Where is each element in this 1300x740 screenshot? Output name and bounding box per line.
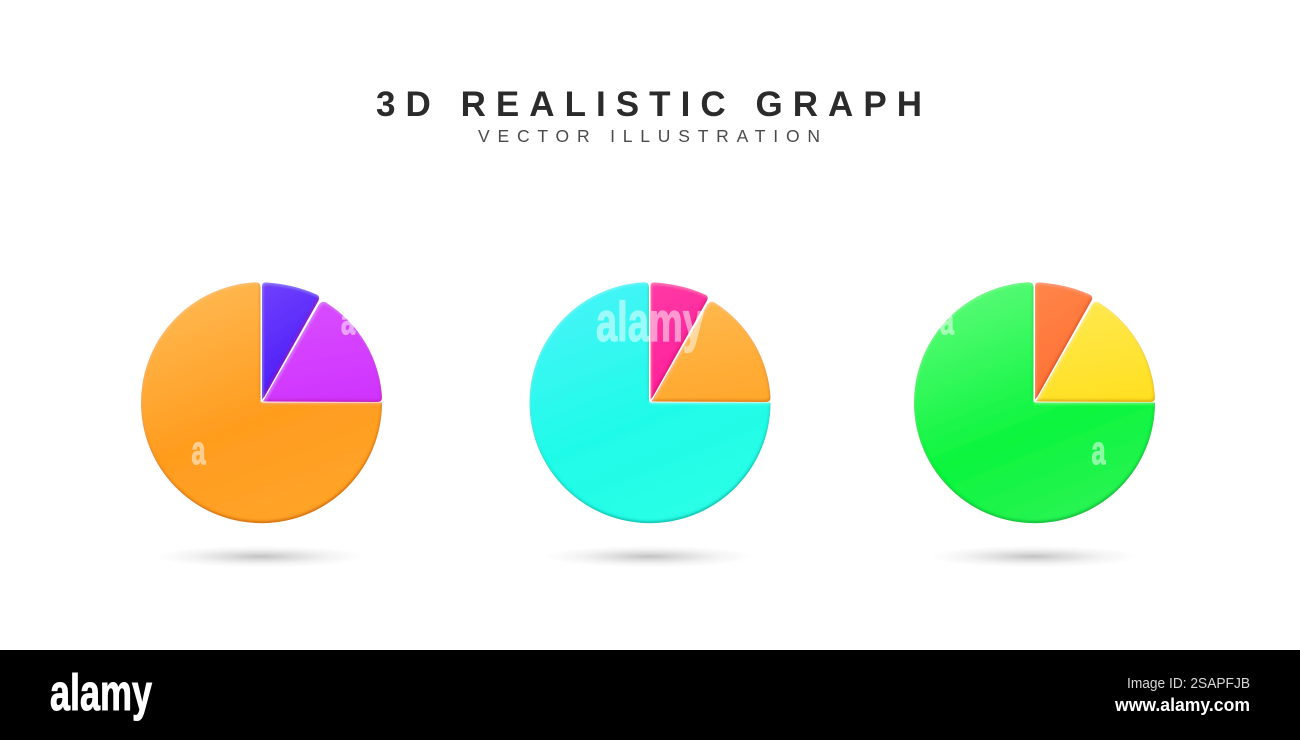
watermark: a — [940, 299, 954, 343]
watermark: alamy — [596, 290, 704, 353]
large green slice — [914, 282, 1155, 523]
shadow — [930, 546, 1138, 568]
watermark: a — [192, 429, 206, 473]
orange-red slice — [1035, 282, 1092, 400]
shadow — [545, 546, 753, 568]
purple slice — [263, 302, 382, 402]
chart: cyan pie — [530, 282, 771, 568]
amber slice — [652, 302, 770, 402]
image id: Image ID: 2SAPFJB — [1127, 675, 1250, 692]
shadow — [156, 546, 364, 568]
yellow slice — [1036, 302, 1155, 402]
large orange slice — [141, 282, 382, 523]
chart: orange pie — [141, 282, 382, 568]
pink slice — [650, 282, 708, 400]
website: www.alamy.com — [1114, 695, 1250, 715]
chart: green pie — [914, 282, 1155, 568]
watermark: a — [341, 299, 355, 343]
blue slice — [262, 282, 319, 400]
watermark: a — [1092, 429, 1106, 473]
footer logo: alamy — [50, 664, 152, 721]
title: 3D REALISTIC GRAPH — [376, 85, 922, 124]
subtitle: VECTOR ILLUSTRATION — [478, 126, 820, 146]
large cyan slice — [530, 282, 771, 523]
footer bar — [0, 650, 1300, 740]
watermark — [192, 290, 1106, 473]
